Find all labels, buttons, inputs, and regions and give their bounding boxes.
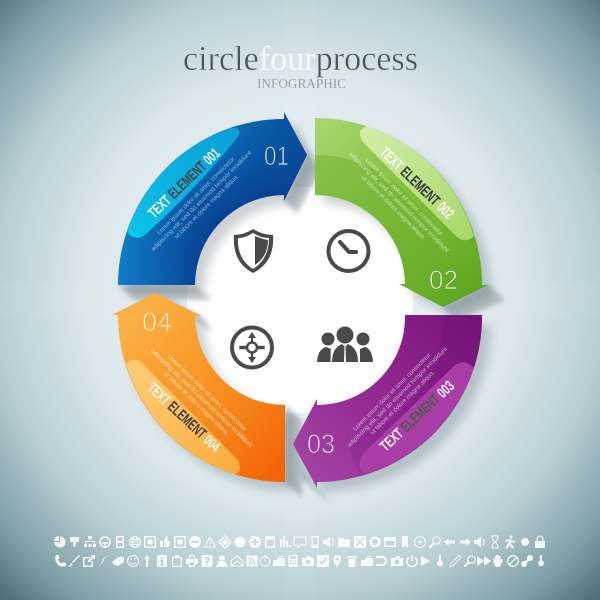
body text purple: adipiscing elit, sed do eiusmod tempor incididunt <box>346 346 449 449</box>
inner shade green <box>315 155 445 285</box>
body text blue: adipiscing elit, sed do eiusmod tempor incididunt <box>150 150 253 253</box>
outer shade purple <box>345 315 482 474</box>
shade blue <box>118 112 307 285</box>
body text purple: Lorem ipsum dolor sit amet, consectetur <box>353 353 432 432</box>
icon row 2 <box>55 555 544 567</box>
icon: compass <box>232 328 272 368</box>
icon: shield <box>234 229 273 273</box>
label band green <box>360 126 474 240</box>
body text orange: adipiscing elit, sed do eiusmod tempor incididunt <box>149 348 254 449</box>
label band purple <box>360 362 474 473</box>
label text purple: TEXT ELEMENT 003 <box>377 378 458 455</box>
icon: clock <box>328 231 368 271</box>
white centre disc <box>187 187 413 413</box>
number 03: 03 <box>307 429 335 459</box>
label band blue <box>127 128 239 238</box>
title: INFOGRAPHIC <box>257 76 346 91</box>
icon: team <box>317 326 373 362</box>
body text orange: ut labore et dolore magna aliqua. <box>162 371 230 437</box>
arrow shape green <box>315 118 488 307</box>
body text green: adipiscing elit, sed do eiusmod tempor incididunt <box>347 151 450 254</box>
number 02: 02 <box>429 265 458 295</box>
label text green: TEXT ELEMENT 002 <box>376 144 457 223</box>
arrow shape blue <box>118 112 307 285</box>
body text orange: Lorem ipsum dolor sit amet, consectetur <box>166 354 247 433</box>
panel: step 2 green arrow <box>315 118 488 307</box>
label band orange <box>126 360 240 474</box>
panel: step 4 orange arrow <box>112 293 285 482</box>
body text green: ut labore et dolore magna aliqua. <box>360 175 426 241</box>
icon row 1 <box>54 536 545 548</box>
panel: shadows <box>118 112 505 506</box>
body text blue: ut labore et dolore magna aliqua. <box>174 174 240 240</box>
number 01: 01 <box>264 141 289 171</box>
body text purple: ut labore et dolore magna aliqua. <box>370 370 436 436</box>
arrow shape purple <box>293 315 482 488</box>
body text blue: Lorem ipsum dolor sit amet, consectetur <box>157 157 236 236</box>
number 04: 04 <box>142 307 172 337</box>
label text orange: TEXT ELEMENT 004 <box>144 379 224 456</box>
panel: step 3 purple arrow <box>293 315 482 488</box>
body text green: Lorem ipsum dolor sit amet, consectetur <box>364 158 443 237</box>
panel: step 1 blue arrow <box>118 112 307 285</box>
title: circlefourprocess <box>183 39 418 78</box>
arrow shape orange <box>112 293 285 482</box>
label text blue: TEXT ELEMENT 001 <box>145 145 224 222</box>
